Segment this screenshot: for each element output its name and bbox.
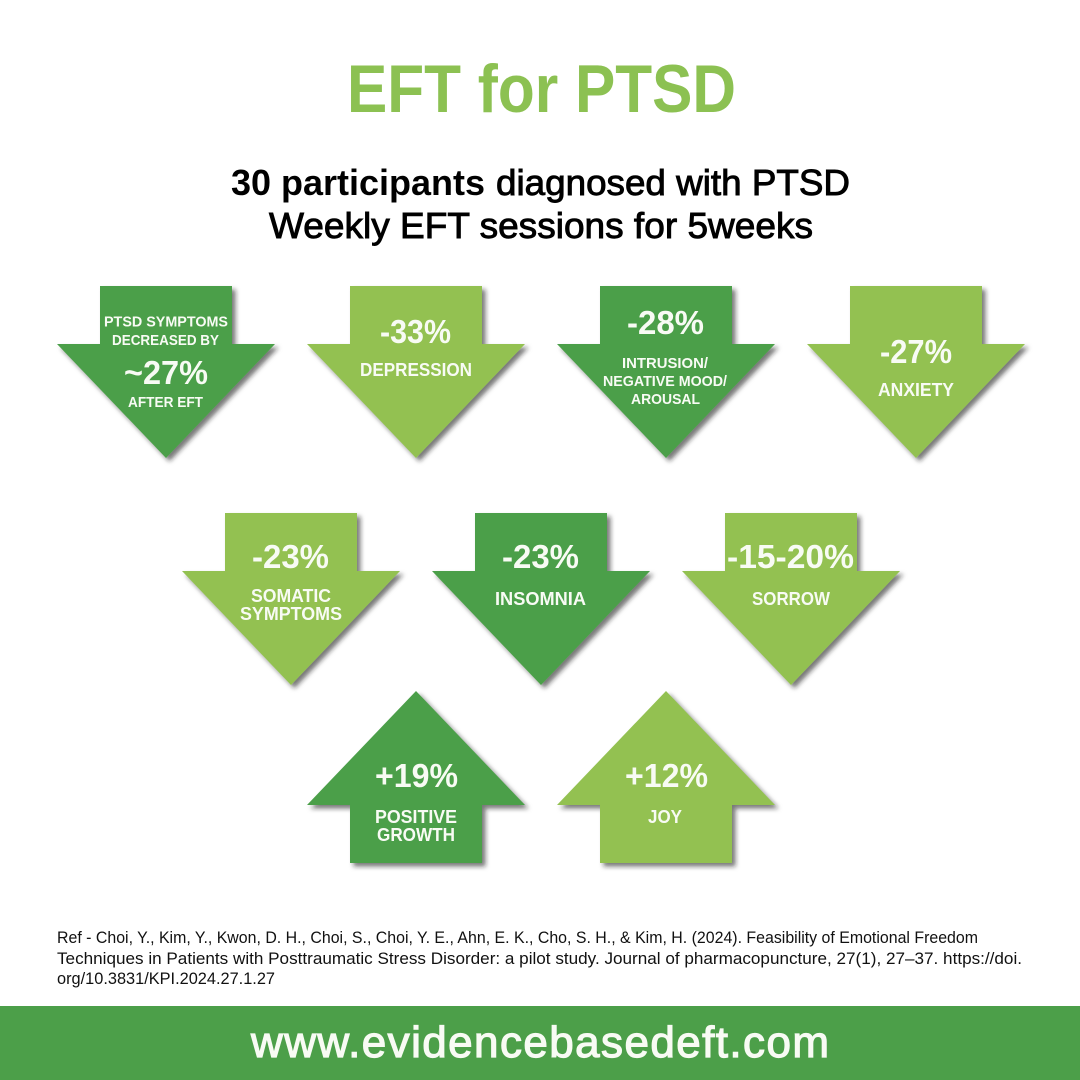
subtitle: diagnosed with PTSD [496,162,850,203]
arrow: somatic symptoms -23%: SYMPTOMS [240,603,342,624]
arrow: intrusion, negative mood, arousal -28%: NEGATIVE MOOD/ [603,373,728,390]
arrow: joy +12%: +12% [625,757,708,794]
subtitle: 30 participants [231,162,485,203]
arrow: somatic symptoms -23% [182,513,400,685]
subtitle [231,162,850,246]
title: EFT for PTSD [347,51,736,127]
arrow: intrusion, negative mood, arousal -28% [557,286,775,458]
arrow: insomnia -23% [432,513,650,685]
arrow: depression -33%: -33% [380,313,451,350]
arrow: intrusion, negative mood, arousal -28%: INTRUSION/ [622,355,709,372]
reference text: Techniques in Patients with Posttraumatic Stress Disorder: a pilot study. Journal of pharmacopuncture, 27(1), 27–37. https://doi. [57,950,1022,968]
footer banner: www.evidencebasedeft.com [250,1018,829,1067]
arrow: anxiety -27% [807,286,1025,458]
arrow: PTSD symptoms -27% [57,286,275,458]
footer banner [0,1006,1080,1080]
arrow: somatic symptoms -23%: -23% [252,538,329,575]
reference text: org/10.3831/KPI.2024.27.1.27 [57,970,275,988]
arrow: PTSD symptoms -27%: AFTER EFT [128,394,203,411]
arrow: joy +12% [557,691,775,863]
arrow: sorrow -15-20%: SORROW [752,588,830,609]
arrow: depression -33%: DEPRESSION [360,359,472,380]
arrow: joy +12%: JOY [648,806,683,827]
reference text [57,929,1022,988]
arrow: depression -33% [307,286,525,458]
arrow: positive growth +19%: GROWTH [377,824,455,845]
arrow: intrusion, negative mood, arousal -28%: AROUSAL [631,391,700,408]
reference text: Ref - Choi, Y., Kim, Y., Kwon, D. H., Choi, S., Choi, Y. E., Ahn, E. K., Cho, S. H., & Kim, H. (2024). Feasibility of Emotional Freedom [57,929,978,947]
arrow: positive growth +19%: +19% [375,757,458,794]
arrow: PTSD symptoms -27%: DECREASED BY [112,332,219,349]
arrow: sorrow -15-20%: -15-20% [727,538,854,575]
arrow: insomnia -23%: -23% [502,538,579,575]
subtitle: Weekly EFT sessions for 5weeks [269,205,813,246]
arrow: anxiety -27%: -27% [880,333,952,370]
arrow: sorrow -15-20% [682,513,900,685]
arrow: anxiety -27%: ANXIETY [878,379,955,400]
arrow: positive growth +19%: POSITIVE [375,806,457,827]
arrow: intrusion, negative mood, arousal -28%: -28% [627,304,704,341]
arrow: somatic symptoms -23%: SOMATIC [251,585,331,606]
arrow: PTSD symptoms -27%: PTSD SYMPTOMS [104,314,228,330]
arrow: positive growth +19% [307,691,525,863]
arrow: insomnia -23%: INSOMNIA [495,588,586,609]
arrow: PTSD symptoms -27%: ~27% [124,354,208,391]
